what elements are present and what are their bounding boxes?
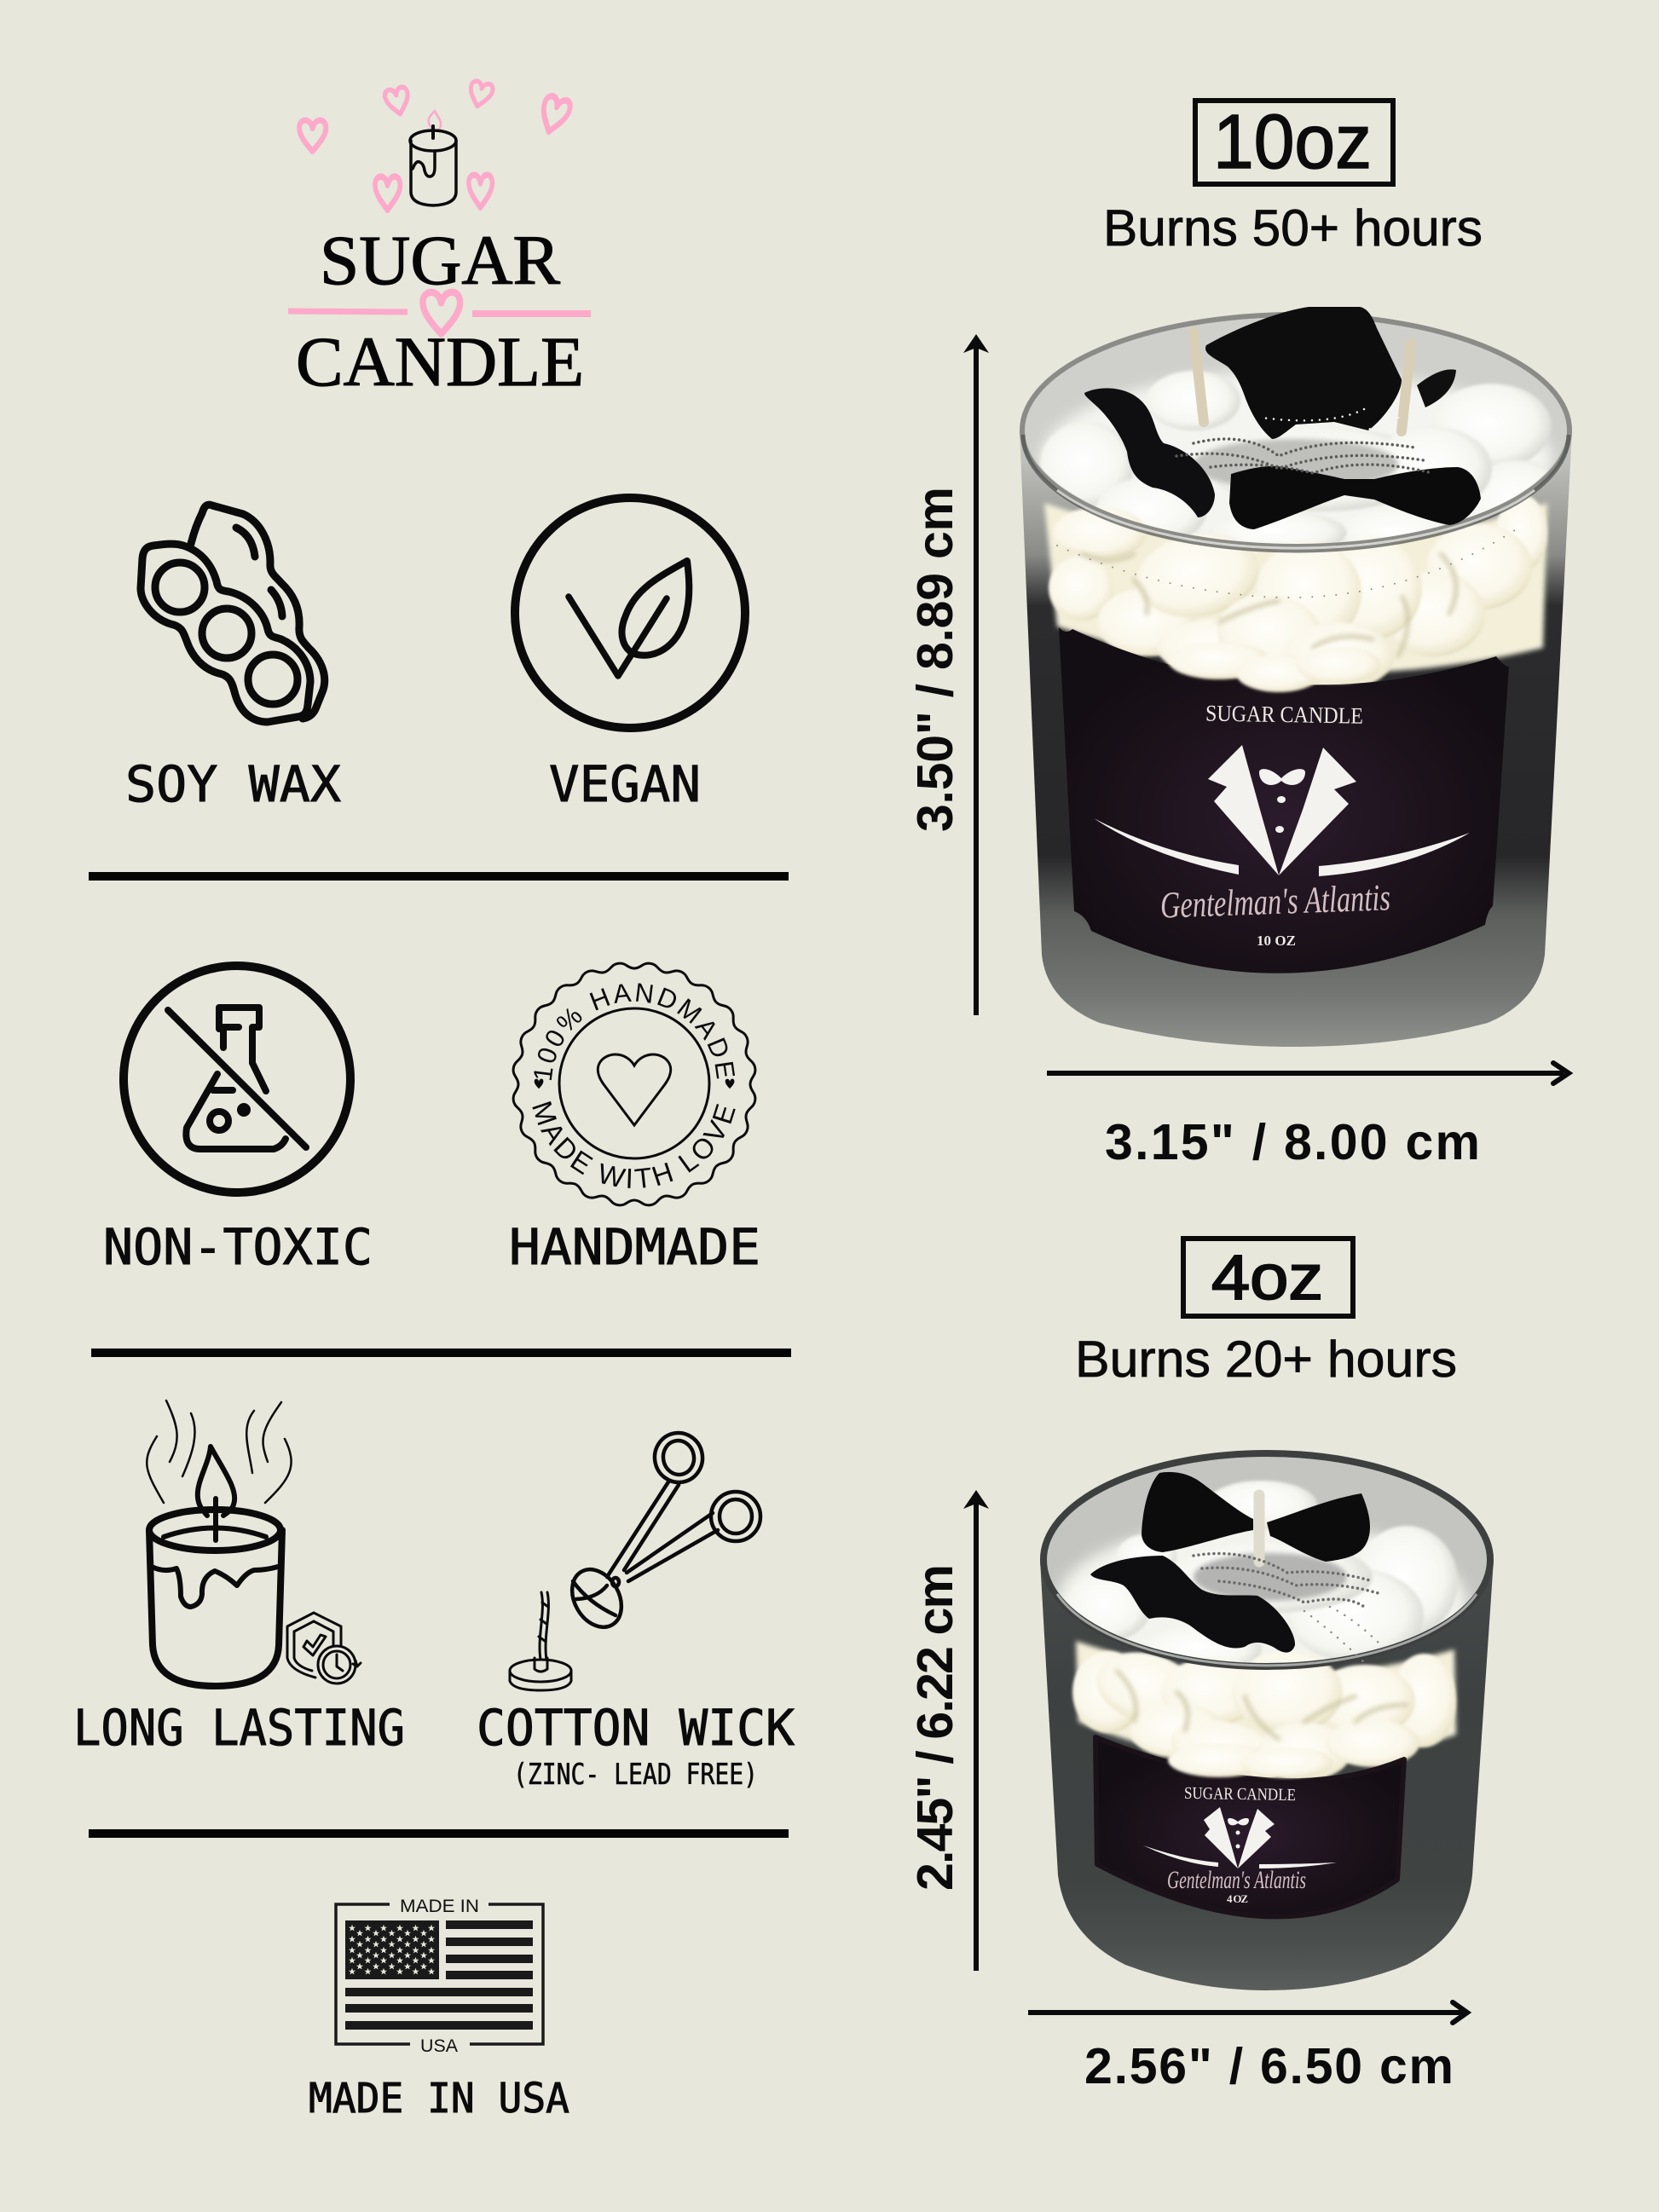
- icon: handmade badge: [512, 962, 757, 1207]
- topper: bow tie: [1142, 1472, 1370, 1562]
- icon: candle: [410, 111, 456, 205]
- whipped wax topping: [1072, 1641, 1456, 1794]
- cream overlapping label top: [1168, 642, 1381, 692]
- photo: 10oz candle: Gentelman's Atlantis: [1159, 876, 1391, 927]
- arrow: height 10oz: [963, 334, 989, 1015]
- dimension: 10oz height: 3.50" / 8.89 cm: [907, 487, 963, 832]
- topper: moustache: [1084, 388, 1215, 517]
- glitter field: [1194, 439, 1398, 490]
- whipped wax topping: [1044, 494, 1547, 696]
- glitter: [1057, 409, 1517, 598]
- badge: 4oz: [1183, 1239, 1353, 1316]
- glitter field: [1194, 1553, 1347, 1601]
- pink divider with heart: [288, 292, 591, 334]
- icon: made in USA flag badge: [336, 1897, 543, 2056]
- cream overlapping label top: [1168, 1743, 1334, 1778]
- whipped creases: [1083, 554, 1456, 673]
- photo: 10oz candle: [1020, 307, 1572, 1047]
- label tuxedo graphic: [1094, 745, 1470, 876]
- label text: SUGAR CANDLE: [1205, 701, 1363, 729]
- wick: [1253, 1495, 1265, 1562]
- product label: [1095, 1737, 1404, 1916]
- inside of jar: [1036, 368, 1556, 544]
- wick on sustainer: [510, 1592, 571, 1690]
- wordmark: SUGAR: [320, 221, 561, 299]
- label: vegan: VEGAN: [549, 755, 701, 813]
- icon: vegan leaf: [515, 498, 745, 728]
- badge: 10oz: 10oz: [1213, 100, 1372, 185]
- topper: moustache: [1090, 1556, 1295, 1653]
- glitter: [1194, 1553, 1381, 1662]
- arrow: width 4oz: [1028, 2002, 1467, 2023]
- label tuxedo graphic: [1143, 1807, 1337, 1868]
- icon: non-toxic flask: [124, 966, 350, 1193]
- arrow: height 4oz: [963, 1490, 989, 1971]
- glass rim: [1043, 1453, 1490, 1666]
- icon: long lasting candle: [147, 1401, 361, 1686]
- flag stars: [349, 1925, 435, 1974]
- logo: Sugar Candle: [288, 80, 591, 401]
- icon: made in USA flag badge: MADE IN: [400, 1897, 479, 1916]
- inside of jar: [1056, 1480, 1470, 1662]
- dimension: 4oz height: 2.45" / 6.22 cm: [907, 1564, 963, 1891]
- label text: SUGAR CANDLE: [1184, 1784, 1296, 1805]
- hearts around the candle: [299, 80, 572, 210]
- label: long lasting: LONG LASTING: [73, 1699, 405, 1757]
- label: soy wax: SOY WAX: [125, 755, 341, 813]
- icon: shield with clock: [287, 1613, 361, 1684]
- product label: [1059, 627, 1509, 973]
- icon: wick trimmer and cotton wick: [510, 1429, 760, 1690]
- label: handmade: HANDMADE: [509, 1218, 760, 1276]
- burn time 4oz: Burns 20+ hours: [1075, 1331, 1457, 1388]
- wordmark second line: CANDLE: [296, 322, 584, 401]
- whipped creases: [1117, 1671, 1407, 1739]
- label: non-toxic: NON-TOXIC: [103, 1218, 373, 1276]
- wicks: [1194, 332, 1411, 431]
- dimension: 4oz width: 2.56" / 6.50 cm: [1084, 2038, 1454, 2094]
- trimmer: [562, 1429, 760, 1636]
- photo: 4oz candle: 4 OZ: [1227, 1892, 1248, 1905]
- dimension: 10oz width: 3.15" / 8.00 cm: [1105, 1114, 1480, 1170]
- label: made in USA: MADE IN USA: [309, 2075, 569, 2122]
- icon: handmade badge: MADE WITH LOVE: [532, 1101, 736, 1188]
- icon: made in USA flag badge: USA: [420, 2036, 458, 2056]
- topper: bow tie: [1229, 466, 1481, 529]
- icon: handmade badge: 100% HANDMADE: [534, 983, 735, 1081]
- photo: 4oz candle: Gentelman's Atlantis: [1167, 1866, 1306, 1894]
- note: zinc and lead free: (ZINC- LEAD FREE): [513, 1758, 758, 1792]
- burn time 10oz: Burns 50+ hours: [1103, 199, 1483, 257]
- badge: 4oz: 4oz: [1211, 1242, 1323, 1313]
- topper: small moustache end: [1417, 369, 1456, 407]
- glass rim: [1022, 315, 1569, 546]
- photo: 10oz candle: 10 OZ: [1257, 933, 1296, 949]
- topper: jacket: [1205, 307, 1402, 439]
- arrow: width 10oz: [1047, 1063, 1569, 1083]
- icon: soy wax: [141, 505, 325, 722]
- label: cotton wick: COTTON WICK: [477, 1699, 795, 1757]
- photo: 4oz candle: [1040, 1451, 1494, 1990]
